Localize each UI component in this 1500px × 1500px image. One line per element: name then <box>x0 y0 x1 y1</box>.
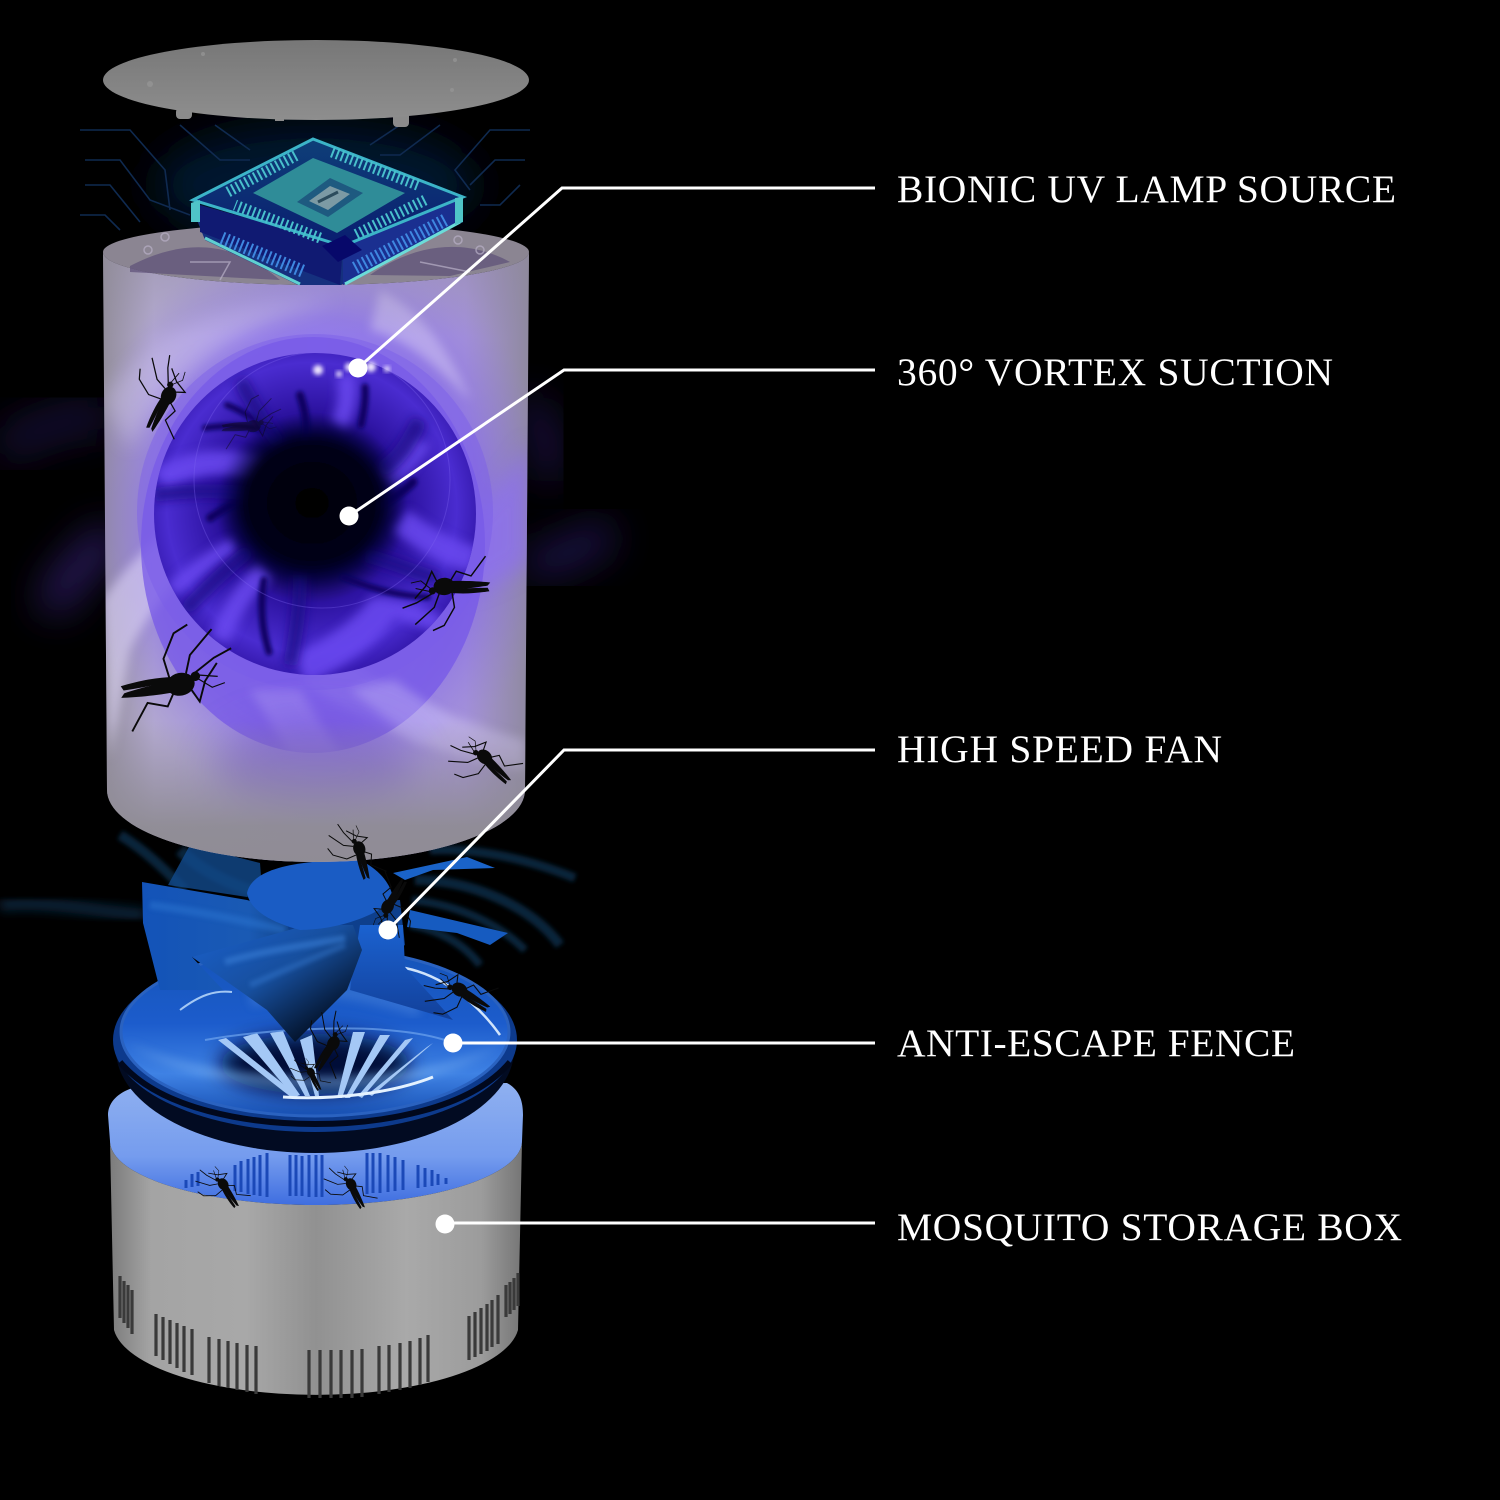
leader line: vortex suction <box>340 370 875 526</box>
mosquito 3 <box>399 556 493 633</box>
band vents <box>186 1153 446 1197</box>
hub <box>247 860 393 930</box>
label: anti-escape fence: ANTI-ESCAPE FENCE <box>897 1021 1295 1065</box>
base top band behind ring <box>108 1083 523 1205</box>
vortex hole <box>154 352 476 675</box>
mosquito 1 <box>118 346 206 442</box>
lid <box>103 40 529 127</box>
anti-escape fence ring <box>108 947 523 1205</box>
label: 360 vortex suction: 360° VORTEX SUCTION <box>897 350 1333 394</box>
back blade <box>168 845 262 897</box>
circuit traces behind chip <box>80 125 530 245</box>
top right blade <box>393 857 495 880</box>
mosquito 8 <box>414 955 500 1036</box>
outer purple glow wisps <box>0 400 610 610</box>
lower base <box>110 1141 522 1398</box>
label: high speed fan: HIGH SPEED FAN <box>897 727 1222 771</box>
leader line: bionic UV lamp source <box>348 188 875 378</box>
vortex halo <box>104 283 528 748</box>
front blade <box>192 925 362 1042</box>
inner rim <box>194 352 450 608</box>
fan airflow streaks <box>0 835 575 965</box>
leader line: high speed fan <box>378 750 875 940</box>
dark core <box>216 415 408 591</box>
left blade <box>142 882 320 990</box>
UV lamp lights <box>313 362 390 377</box>
lid tabs <box>176 108 409 127</box>
fan core shadow <box>280 900 405 975</box>
mosquito 5 <box>438 719 525 805</box>
chip <box>191 139 463 285</box>
mosquito 11 <box>188 1154 252 1221</box>
mosquito 10 <box>285 1050 332 1100</box>
right blade <box>407 910 508 945</box>
upper cylinder <box>75 230 555 870</box>
bottom vents <box>120 1273 518 1398</box>
mosquito 9 <box>292 1003 364 1081</box>
mosquito 12 <box>317 1155 378 1220</box>
bottom right blade <box>350 925 453 1020</box>
mosquito 2, inside hole <box>217 392 286 449</box>
mosquito 4 <box>109 617 244 732</box>
leader line: mosquito storage box <box>436 1214 875 1234</box>
swirl dark streaks <box>205 387 428 652</box>
cylinder top circuit face <box>103 223 529 285</box>
mosquito 7 <box>357 869 429 947</box>
label: mosquito storage box: MOSQUITO STORAGE BOX <box>897 1205 1402 1249</box>
fan <box>142 845 508 1042</box>
mosquitoes <box>109 346 525 1221</box>
label: bionic UV lamp source: BIONIC UV LAMP SOURCE <box>897 167 1396 211</box>
swirl light streaks <box>160 375 475 670</box>
mosquito 6 <box>321 814 387 888</box>
leader line: anti-escape fence <box>444 1034 875 1052</box>
radial spokes <box>218 1031 433 1098</box>
